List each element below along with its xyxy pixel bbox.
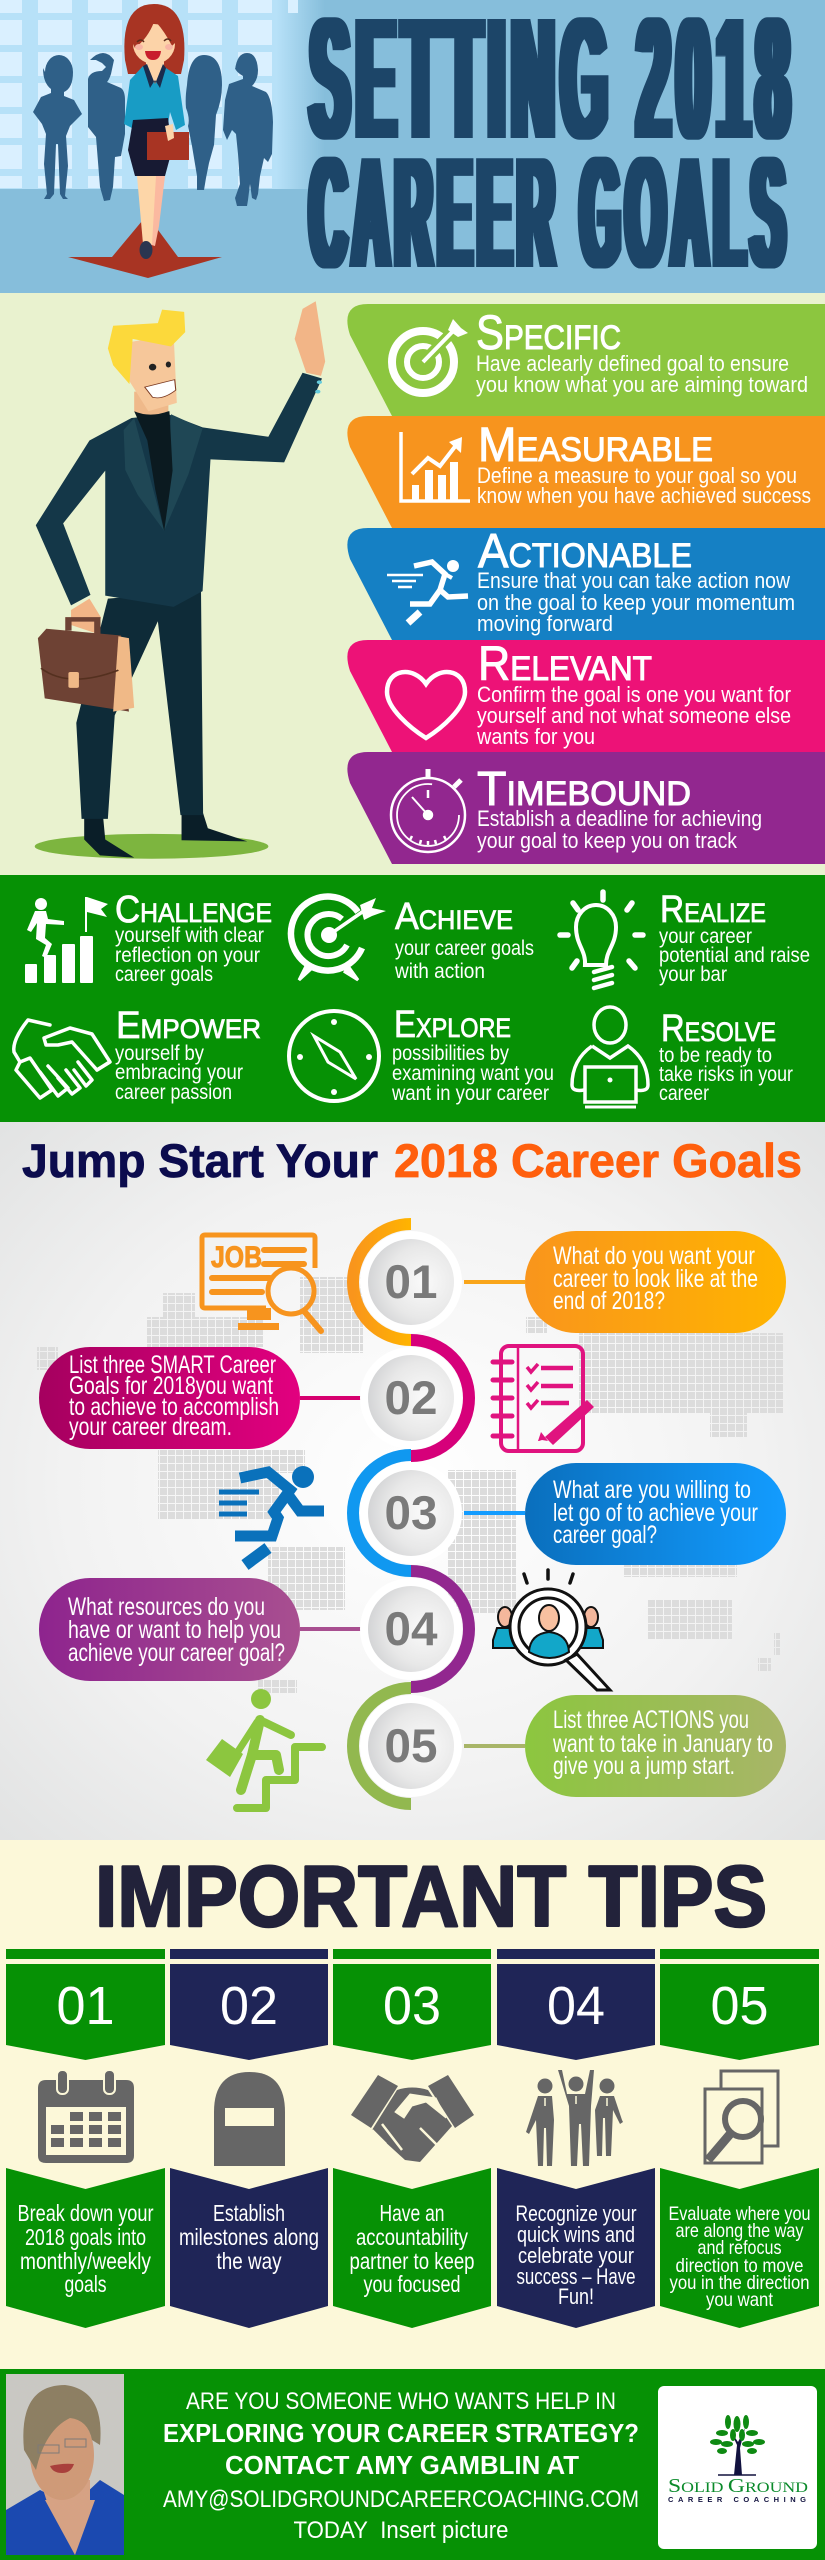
icon: celebrating team bbox=[526, 2070, 623, 2166]
tip 01: goals bbox=[64, 2271, 106, 2297]
text: Relevant description bbox=[476, 682, 791, 749]
text: Achieve description: your career goals bbox=[395, 937, 534, 960]
tip 05 bbox=[660, 1949, 819, 2328]
heading: Important Tips: IMPORTANT TIPS bbox=[95, 1849, 767, 1945]
tip 02: 02 bbox=[220, 1976, 278, 2036]
tip 03: Have an bbox=[380, 2200, 444, 2226]
tip 01: Break down your bbox=[18, 2200, 154, 2226]
icon: heart bbox=[387, 672, 465, 738]
step 04: have or want to help you bbox=[68, 1616, 281, 1644]
text: Actionable description: moving forward bbox=[477, 611, 613, 636]
tip 01: monthly/weekly bbox=[20, 2248, 151, 2274]
step 03: 03 bbox=[384, 1486, 438, 1539]
icon: climbing businessman bbox=[206, 1689, 322, 1808]
heading: Achieve: ACHIEVE bbox=[395, 896, 513, 938]
tip 03: you focused bbox=[364, 2271, 460, 2297]
text: Empower description: embracing your bbox=[115, 1061, 243, 1084]
block: Realize bbox=[560, 889, 810, 988]
tip 01 bbox=[6, 1949, 165, 2328]
step 04 bbox=[39, 1571, 469, 1687]
panel: jump start timeline bbox=[0, 1122, 825, 1840]
ribbon: Measurable bbox=[347, 416, 825, 528]
icon: businesswoman bbox=[124, 4, 189, 259]
text: Resolve description: to be ready to bbox=[659, 1044, 772, 1067]
heading: Measurable: MEASURABLE bbox=[478, 419, 713, 472]
step 03: What are you willing to bbox=[553, 1476, 751, 1504]
text: call to action bbox=[163, 2388, 639, 2544]
icon: checklist bbox=[493, 1346, 594, 1451]
step 02 bbox=[39, 1340, 469, 1456]
panel: six career actions bbox=[0, 875, 825, 1122]
world map dots bbox=[37, 1277, 784, 1693]
tip 04: quick wins and bbox=[517, 2222, 635, 2247]
text: Challenge description: reflection on your bbox=[115, 944, 260, 967]
heading: Resolve: RESOLVE bbox=[661, 1008, 776, 1050]
tip 03: accountability bbox=[356, 2224, 468, 2250]
icon: silhouettes of colleagues bbox=[33, 53, 273, 206]
block: Resolve bbox=[572, 1007, 793, 1107]
step 02: 02 bbox=[384, 1371, 438, 1424]
text: Timebound description bbox=[477, 806, 762, 853]
text: Challenge description: career goals bbox=[115, 963, 213, 986]
text: Realize description: your bar bbox=[659, 963, 727, 986]
icon: blue runner bbox=[219, 1466, 324, 1565]
text: Timebound description: Establish a deadline for achieving bbox=[477, 806, 762, 831]
text: Empower description: yourself by bbox=[115, 1042, 204, 1065]
icon: documents with magnifier bbox=[705, 2071, 778, 2163]
ribbon: Specific bbox=[347, 304, 825, 416]
text: Explore description bbox=[391, 1042, 554, 1105]
icon: rising chart bbox=[401, 432, 470, 501]
logo: Solid Ground Career Coaching bbox=[658, 2386, 817, 2549]
step 01: 01 bbox=[384, 1255, 438, 1308]
text: Actionable description: on the goal to keep your momentum bbox=[477, 590, 795, 615]
icon: handshake outline bbox=[14, 1020, 110, 1098]
text: Specific description: Have aclearly defined goal to ensure bbox=[476, 351, 789, 376]
ribbon: Relevant bbox=[347, 638, 825, 752]
tip 01: 2018 goals into bbox=[25, 2224, 146, 2250]
tip 02 bbox=[170, 1949, 328, 2328]
panel: contact footer bbox=[0, 2369, 825, 2560]
icon: handshake solid bbox=[351, 2075, 474, 2162]
tip 03 bbox=[333, 1949, 491, 2328]
step 04: achieve your career goal? bbox=[68, 1639, 285, 1667]
block: Explore bbox=[289, 1004, 554, 1105]
tip 02: the way bbox=[216, 2248, 282, 2274]
text: Realize description bbox=[659, 925, 810, 986]
text: Relevant description: yourself and not what someone else bbox=[477, 703, 791, 728]
step 01: end of 2018? bbox=[553, 1287, 665, 1315]
text: Achieve description: with action bbox=[394, 960, 485, 983]
text: call to action: AMY@SOLIDGROUNDCAREERCOACHING.COM bbox=[163, 2486, 639, 2513]
text: call to action: CONTACT AMY GAMBLIN AT bbox=[225, 2450, 579, 2480]
icon: compass bbox=[289, 1011, 379, 1101]
icon: tree bbox=[710, 2415, 765, 2475]
heading: Specific: SPECIFIC bbox=[476, 307, 621, 360]
text: Explore description: possibilities by bbox=[392, 1042, 509, 1065]
text: Relevant description: Confirm the goal is one you want for bbox=[477, 682, 791, 707]
step 02: Goals for 2018you want bbox=[69, 1372, 273, 1400]
text: Explore description: want in your career bbox=[391, 1082, 549, 1105]
heading: Relevant: RELEVANT bbox=[478, 638, 652, 691]
icon: person at laptop bbox=[572, 1007, 648, 1107]
text: Specific description bbox=[476, 351, 808, 397]
text: call to action: EXPLORING YOUR CAREER STRATEGY? bbox=[163, 2418, 639, 2448]
text: call to action: TODAY Insert picture bbox=[294, 2517, 508, 2544]
icon: job search: JOB bbox=[211, 1241, 262, 1274]
text: Relevant description: wants for you bbox=[476, 724, 595, 749]
icon: job search bbox=[202, 1235, 321, 1331]
text: Resolve description bbox=[659, 1044, 793, 1105]
step 05 bbox=[353, 1688, 786, 1804]
icon: target bbox=[392, 319, 468, 393]
tip 05: 05 bbox=[710, 1976, 768, 2036]
text: Empower description bbox=[115, 1042, 243, 1104]
text: Realize description: your career bbox=[659, 925, 752, 948]
heading: Jump Start: Jump Start Your bbox=[22, 1134, 378, 1187]
icon: search for people bbox=[493, 1570, 610, 1690]
icon: runner bbox=[387, 560, 468, 623]
step 04: What resources do you bbox=[68, 1593, 265, 1621]
step 05: 05 bbox=[384, 1719, 438, 1772]
step 04: 04 bbox=[384, 1602, 438, 1655]
text: Achieve description bbox=[394, 937, 534, 983]
step 03 bbox=[353, 1455, 786, 1571]
tip 01: 01 bbox=[56, 1976, 114, 2036]
logo: Solid Ground Career Coaching: CAREER COACHING bbox=[668, 2495, 808, 2504]
heading: Empower: EMPOWER bbox=[116, 1005, 261, 1047]
step 02: to achieve to accomplish bbox=[69, 1393, 279, 1421]
block: Achieve bbox=[291, 896, 534, 983]
text: Resolve description: take risks in your bbox=[659, 1063, 793, 1086]
logo: Solid Ground Career Coaching: SOLID GROUND bbox=[668, 2475, 808, 2497]
text: Challenge description: yourself with clear bbox=[115, 924, 264, 947]
heading: Actionable: ACTIONABLE bbox=[478, 525, 692, 578]
panel: header bbox=[0, 0, 825, 301]
text: Actionable description: Ensure that you can take action now bbox=[477, 568, 790, 593]
step 01: What do you want your bbox=[553, 1242, 755, 1270]
icon: milestone marker bbox=[214, 2072, 285, 2166]
step 01: career to look like at the bbox=[553, 1265, 758, 1293]
step 05: List three ACTIONS you bbox=[553, 1706, 749, 1734]
tip 02: Establish bbox=[213, 2200, 285, 2226]
text: Explore description: examining want you bbox=[392, 1062, 554, 1085]
block: Challenge bbox=[25, 889, 272, 986]
icon: red arrow bbox=[68, 215, 222, 278]
text: Challenge description bbox=[115, 924, 264, 986]
icon: target with legs bbox=[291, 897, 386, 980]
heading: Timebound: TIMEBOUND bbox=[477, 763, 691, 816]
icon: businessman with briefcase bbox=[35, 301, 325, 859]
text: Empower description: career passion bbox=[115, 1081, 232, 1104]
heading: Challenge: CHALLENGE bbox=[115, 889, 272, 931]
icon: light bulb bbox=[560, 892, 643, 988]
ribbon: Actionable bbox=[347, 525, 825, 640]
text: Timebound description: your goal to keep you on track bbox=[477, 828, 738, 853]
tip 04: success – Have bbox=[516, 2264, 636, 2289]
tip 05: are along the way bbox=[676, 2220, 804, 2242]
icon: climbing steps bbox=[25, 897, 108, 983]
panel: important tips bbox=[0, 1840, 825, 2369]
tip 04 bbox=[497, 1949, 655, 2328]
photo: Amy Gamblin bbox=[6, 2374, 124, 2555]
heading: Explore: EXPLORE bbox=[394, 1004, 511, 1046]
text: Measurable description bbox=[477, 463, 811, 508]
tip 04: Recognize your bbox=[516, 2201, 636, 2226]
icon: calendar bbox=[38, 2070, 134, 2163]
title bbox=[310, 0, 796, 301]
heading: 2018 Career Goals: 2018 Career Goals bbox=[394, 1134, 802, 1187]
text: call to action: ARE YOU SOMEONE WHO WANTS HELP IN bbox=[186, 2388, 616, 2415]
tip 03: 03 bbox=[383, 1976, 441, 2036]
tip 03: partner to keep bbox=[350, 2248, 474, 2274]
heading: Realize: REALIZE bbox=[660, 889, 766, 931]
step 03: career goal? bbox=[553, 1521, 657, 1549]
tip 05: direction to move bbox=[676, 2255, 804, 2277]
step 05: give you a jump start. bbox=[553, 1752, 735, 1780]
icon: stopwatch bbox=[391, 769, 465, 852]
text: Actionable description bbox=[477, 568, 795, 636]
panel: SMART goals bbox=[0, 293, 825, 875]
tip 05: you want bbox=[706, 2289, 773, 2311]
step 02: List three SMART Career bbox=[69, 1351, 276, 1379]
text: Resolve description: career bbox=[659, 1082, 709, 1105]
tip 04: celebrate your bbox=[518, 2243, 634, 2268]
step 03: let go of to achieve your bbox=[553, 1499, 758, 1527]
tip 04: Fun! bbox=[558, 2284, 594, 2309]
ribbon: Timebound bbox=[347, 752, 825, 864]
tip 05: and refocus bbox=[698, 2237, 782, 2259]
block: Empower bbox=[14, 1005, 261, 1104]
tip 04: 04 bbox=[547, 1976, 605, 2036]
step 01 bbox=[353, 1224, 786, 1340]
step 02: your career dream. bbox=[69, 1413, 232, 1441]
tip 02: milestones along bbox=[179, 2224, 319, 2250]
